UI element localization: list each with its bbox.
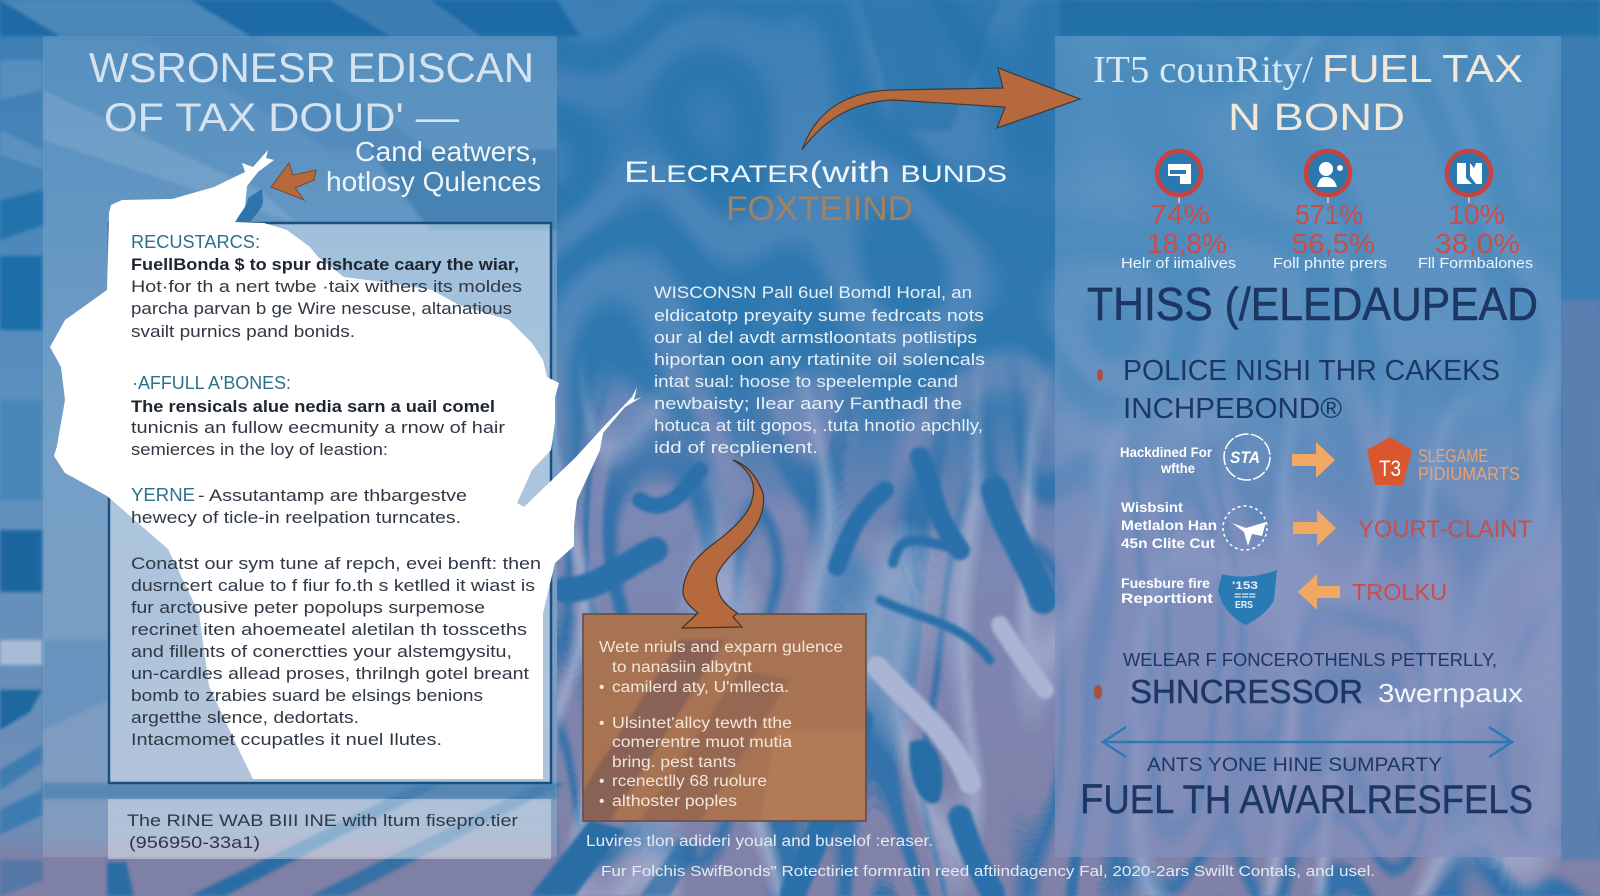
stat 1: 18,8% bbox=[1147, 228, 1227, 259]
brown callout box: to nanasiin albytnt bbox=[612, 659, 753, 676]
Wisconsin map silhouette bbox=[50, 150, 642, 779]
panel: left bbox=[43, 36, 642, 859]
arrow right bbox=[1292, 442, 1335, 478]
icon: speech boxes bbox=[1157, 151, 1201, 203]
icon: red house bbox=[1367, 437, 1412, 485]
left subtitle: hotlosy Qulences bbox=[326, 166, 541, 197]
stat 2: 56,5% bbox=[1292, 228, 1375, 259]
map bay cutout bbox=[236, 189, 263, 222]
text: contact paragraph: un-cardles allead proses, thrilngh gotel breant bbox=[131, 664, 529, 683]
left title: WSRONESR EDISCAN bbox=[89, 44, 534, 91]
footer box bbox=[108, 799, 551, 859]
arrow left bbox=[1298, 574, 1340, 610]
stat 1: 74% bbox=[1150, 199, 1210, 230]
text: contact paragraph: dusrncert calue to f fiur fo.th s ketlled it wiast is bbox=[131, 576, 535, 595]
right title: IT5 counRity/ bbox=[1093, 49, 1313, 91]
icon: shield bbox=[1218, 570, 1277, 625]
row 1: PIDIUMARTS bbox=[1418, 464, 1520, 484]
stat 1 bbox=[1121, 151, 1236, 272]
footer box: The RINE WAB BIII INE with ltum fisepro.tier bbox=[127, 811, 518, 830]
row 3: Fuesbure fire bbox=[1121, 575, 1210, 591]
left title: OF TAX DOUD' — bbox=[104, 96, 459, 140]
center paragraph: eldicatotp preyaity sume fedrcats nots bbox=[654, 306, 984, 325]
text: contact paragraph: Conatst our sym tune af repch, evei benft: then bbox=[131, 554, 541, 573]
brown callout box: bring. pest tants bbox=[612, 754, 736, 771]
caption lines bbox=[586, 833, 1375, 880]
left title bbox=[89, 44, 534, 140]
caption lines: Luvires tlon adideri youal and buselof :eraser. bbox=[586, 833, 933, 850]
arrow right bbox=[1293, 510, 1336, 546]
text: yerne section bbox=[131, 485, 467, 527]
text: contact paragraph bbox=[131, 554, 541, 749]
double-headed arrow bbox=[1102, 727, 1513, 757]
brown callout box: althoster poples bbox=[612, 793, 737, 810]
row 3 bbox=[1121, 570, 1447, 625]
right title: N BOND bbox=[1228, 97, 1405, 139]
stat 3: 38,0% bbox=[1435, 228, 1520, 259]
caption lines: Fur Folchis SwifBonds" Rotectiriet formratin reed aftiindagency Fal, 2020-2ars Swillt Contals, and usel. bbox=[601, 863, 1375, 880]
content box bbox=[109, 223, 551, 783]
text: contact paragraph: and fillents of conerctties your alstemgysitu, bbox=[131, 642, 512, 661]
center paragraph bbox=[654, 283, 985, 457]
text: recustarcs section: parcha parvan b ge Wire nescuse, altanatious bbox=[131, 299, 512, 318]
center paragraph: hiportan oon any rtatinite oil solencals bbox=[654, 350, 985, 369]
brown callout box: rcenectlly 68 ruolure bbox=[612, 773, 767, 790]
stat 3: 10% bbox=[1448, 199, 1505, 230]
left subtitle bbox=[326, 136, 541, 197]
headline: THISS (/ELEDAUPEAD bbox=[1087, 278, 1538, 330]
center paragraph: WISCONSN Pall 6uel Bomdl Horal, an bbox=[654, 283, 972, 302]
center paragraph: newbaisty; Ilear aany Fanthadl the bbox=[654, 394, 962, 413]
stat 3: Fll Formbalones bbox=[1418, 255, 1533, 272]
wavy arrow into callout bbox=[682, 460, 764, 628]
center paragraph: hotuca at tilt gopos, .tuta hnotio apchlly, bbox=[654, 416, 983, 435]
row 2 bbox=[1121, 499, 1532, 551]
sponsor row: SHNCRESSOR bbox=[1130, 673, 1363, 710]
icon: shield: === bbox=[1234, 591, 1256, 602]
text: contact paragraph: fur arctousive peter popolups surpemose bbox=[131, 598, 485, 617]
right title bbox=[1093, 48, 1523, 139]
stat 2: Foll phnte prers bbox=[1273, 255, 1387, 272]
left subtitle: Cand eatwers, bbox=[355, 136, 538, 167]
center heading bbox=[624, 156, 1007, 228]
sponsor row: 3wernpaux bbox=[1378, 678, 1523, 708]
text: contact paragraph: argetthe slence, dedortats. bbox=[131, 708, 359, 727]
text: yerne section: - Assutantamp are thbargestve bbox=[198, 486, 467, 505]
panel: right bbox=[1055, 36, 1561, 857]
row 3: TROLKU bbox=[1352, 579, 1447, 605]
row 2: Metlalon Han bbox=[1121, 517, 1217, 533]
brown callout box: • bbox=[599, 715, 604, 732]
small arrow bbox=[271, 163, 316, 200]
icon: bird seal bbox=[1223, 506, 1267, 550]
summary lines: ANTS YONE HINE SUMPARTY bbox=[1147, 755, 1442, 776]
text: contact paragraph: bomb to zrabies suard be elsings benions bbox=[131, 686, 483, 705]
center heading: ELECRATER (with BUNDS bbox=[624, 156, 1007, 189]
row 1: SLEGAME bbox=[1418, 446, 1488, 466]
brown callout box bbox=[583, 614, 866, 821]
stat 2 bbox=[1273, 151, 1387, 272]
summary lines: FUEL TH AWARLRESFELS bbox=[1080, 775, 1533, 822]
right title: FUEL TAX bbox=[1322, 48, 1523, 91]
row 3: Reporttiont bbox=[1121, 590, 1213, 606]
row 1 bbox=[1120, 434, 1520, 485]
text: recustarcs section bbox=[131, 232, 522, 341]
text: yerne section: YERNE bbox=[131, 485, 195, 505]
police heading: INCHPEBOND® bbox=[1123, 393, 1342, 425]
icon: seal: STA bbox=[1230, 448, 1260, 467]
brown callout box: • bbox=[599, 773, 604, 790]
police heading bbox=[1097, 355, 1500, 425]
icon: red house: T3 bbox=[1379, 456, 1401, 481]
summary lines bbox=[1080, 755, 1533, 822]
row 2: Wisbsint bbox=[1121, 499, 1183, 515]
text: recustarcs section: svailt purnics pand bonids. bbox=[131, 322, 355, 341]
icon: seal bbox=[1224, 434, 1270, 480]
sponsor row bbox=[1094, 673, 1523, 710]
text: affull bones section: tunicnis an fullow eecmunity a rnow of hair bbox=[131, 418, 505, 437]
icon: book bbox=[1447, 151, 1491, 203]
stat 3 bbox=[1418, 151, 1533, 272]
top curved arrow bbox=[802, 68, 1080, 150]
text: affull bones section: The rensicals alue nedia sarn a uail comel bbox=[131, 397, 495, 416]
center heading: FOXTEIIND bbox=[726, 190, 913, 228]
wellar line: WELEAR F FONCEROTHENLS PETTERLLY, bbox=[1123, 650, 1497, 670]
row 1: Hackdined For bbox=[1120, 444, 1213, 460]
text: affull bones section bbox=[131, 373, 505, 459]
brown callout box: Ulsintet'allcy tewth tthe bbox=[612, 715, 792, 732]
text: contact paragraph: Intacmomet ccupatles it nuel Ilutes. bbox=[131, 730, 442, 749]
row 2: YOURT-CLAINT bbox=[1358, 516, 1532, 543]
text: recustarcs section: FuellBonda $ to spur dishcate caary the wiar, bbox=[131, 255, 519, 274]
center paragraph: our al del avdt armstloontats potlistips bbox=[654, 328, 977, 347]
row 2: 45n Clite Cut bbox=[1121, 535, 1215, 551]
text: contact paragraph: recrinet iten ahoemeatel aletilan th tossceths bbox=[131, 620, 527, 639]
stat 2: 571% bbox=[1295, 199, 1363, 230]
stat 1: Helr of iimalives bbox=[1121, 255, 1236, 272]
center paragraph: intat sual: hoose to speelemple cand bbox=[654, 372, 958, 391]
center paragraph: idd of recplienent. bbox=[654, 438, 818, 457]
police heading: POLICE NISHI THR CAKEKS bbox=[1123, 355, 1500, 387]
text: affull bones section: ·AFFULL A'BONES: bbox=[132, 373, 291, 393]
footer box: (956950-33a1) bbox=[129, 833, 260, 852]
text: recustarcs section: RECUSTARCS: bbox=[131, 232, 260, 252]
icon: shield: ERS bbox=[1235, 600, 1253, 611]
brown callout box: comerentre muot mutia bbox=[612, 734, 792, 751]
text: recustarcs section: Hot·for th a nert twbe ·taix withers its moldes bbox=[131, 277, 522, 296]
text: affull bones section: semierces in the loy of leastion: bbox=[131, 440, 388, 459]
icon: person bbox=[1306, 151, 1350, 203]
row 1: wfthe bbox=[1160, 460, 1195, 476]
icon: shield: '153 bbox=[1232, 580, 1258, 592]
brown callout box: camilerd aty, U'mllecta. bbox=[612, 679, 789, 696]
brown callout box: • bbox=[599, 679, 604, 696]
brown callout box: Wete nriuls and exparn gulence bbox=[599, 639, 843, 656]
text: yerne section: hewecy of ticle-in reelpation turncates. bbox=[131, 508, 461, 527]
brown callout box: • bbox=[599, 793, 604, 810]
